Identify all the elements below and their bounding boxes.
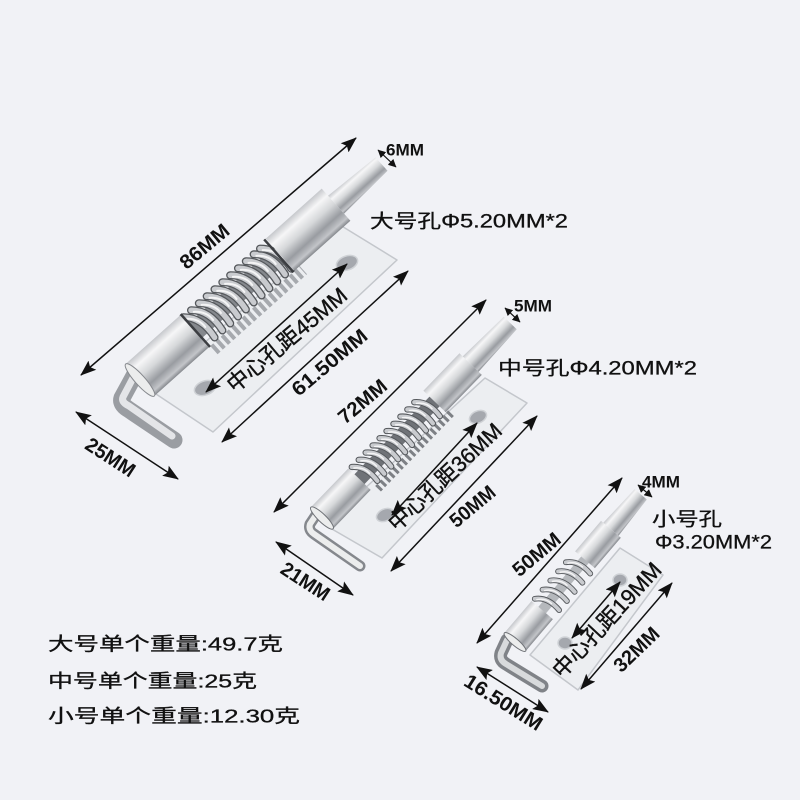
- small latch mounting holes: [558, 574, 627, 649]
- medium latch dimension labels: 5MM: [514, 296, 552, 316]
- dimension arrows: medium latch: [274, 300, 537, 595]
- small latch dimension labels: [460, 472, 680, 736]
- large latch dimension labels: 86MM: [176, 220, 234, 274]
- large latch dimension labels: 中心孔距45MM: [222, 283, 352, 397]
- weight list: 小号单个重量:12.30克: [48, 706, 300, 726]
- medium latch mounting holes: [374, 408, 489, 524]
- medium latch hook handle: [310, 512, 360, 566]
- small latch dimension labels: 4MM: [642, 472, 680, 492]
- small latch plate: [530, 548, 663, 690]
- large latch dimension labels: 61.50MM: [288, 325, 372, 401]
- small latch hole label: 小号孔: [652, 508, 722, 530]
- small latch hole label: Φ3.20MM*2: [655, 532, 772, 554]
- large latch bolt: [122, 148, 400, 403]
- large latch hook handle: [122, 376, 174, 440]
- weight list: 大号单个重量:49.7克: [48, 634, 283, 654]
- small latch hook handle: [501, 640, 542, 686]
- medium latch hole label: 中号孔Φ4.20MM*2: [498, 358, 697, 380]
- medium latch bolt: [308, 312, 525, 535]
- small latch: [501, 485, 663, 690]
- medium latch dimension labels: 中心孔距36MM: [383, 418, 507, 536]
- large latch dimension labels: 25MM: [81, 434, 139, 482]
- large latch plate: [150, 225, 397, 432]
- weight list: [48, 634, 300, 726]
- small latch dimension labels: 中心孔距19MM: [547, 557, 667, 683]
- large latch dimension labels: [81, 140, 424, 482]
- large latch: [122, 148, 400, 440]
- dimension arrows: large latch: [76, 138, 408, 479]
- small latch dimension labels: 32MM: [610, 623, 664, 677]
- large latch mounting holes: [192, 253, 360, 398]
- small latch bolt: [502, 485, 651, 654]
- medium latch dimension labels: [276, 296, 552, 606]
- medium latch dimension labels: 72MM: [334, 375, 392, 429]
- small latch dimension labels: 50MM: [508, 529, 566, 581]
- weight list: 中号单个重量:25克: [48, 670, 257, 692]
- medium latch: [308, 312, 527, 566]
- medium latch plate: [325, 378, 527, 558]
- dimension arrows: small latch: [477, 478, 672, 712]
- medium latch dimension labels: 21MM: [276, 558, 334, 606]
- large latch dimension labels: 6MM: [386, 140, 424, 160]
- small latch dimension labels: 16.50MM: [460, 670, 546, 736]
- large latch hole label: 大号孔Φ5.20MM*2: [370, 210, 568, 232]
- medium latch dimension labels: 50MM: [446, 482, 500, 532]
- small latch hole label: [652, 508, 772, 554]
